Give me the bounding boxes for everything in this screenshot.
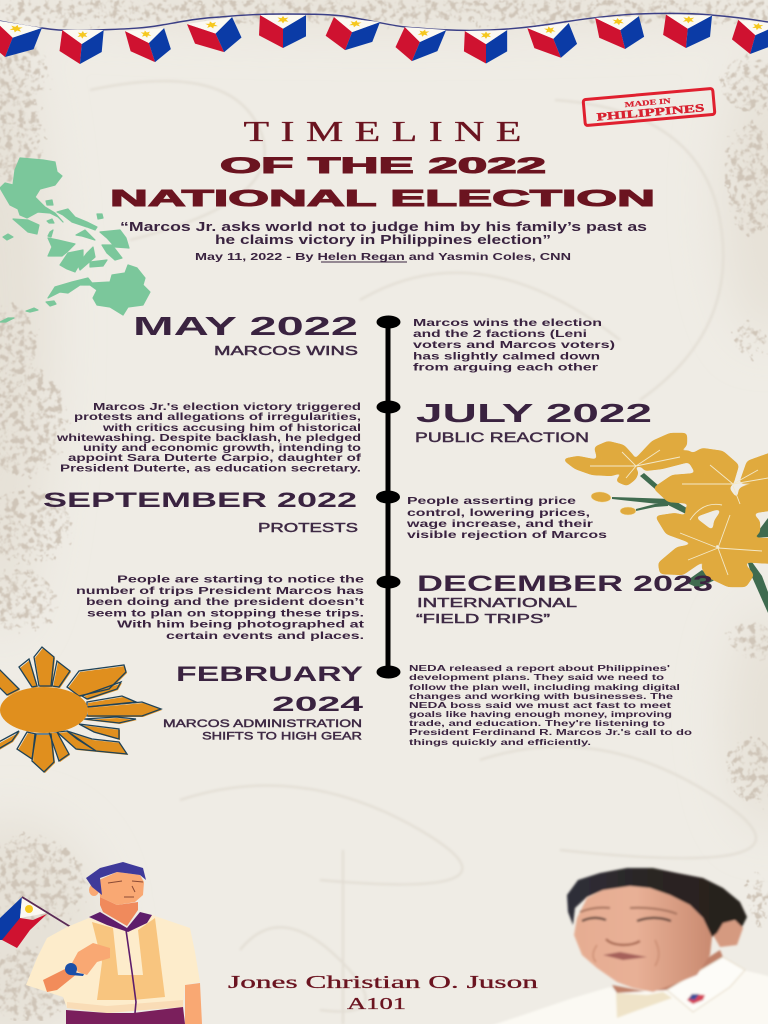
eyebrows [580, 908, 677, 914]
stamp: made in Philippines [583, 88, 715, 126]
node December 2023 [376, 576, 400, 588]
entry: May 2022 description [413, 318, 615, 374]
photo: President Marcos portrait [490, 868, 768, 1024]
stems [612, 473, 768, 613]
petal veins [590, 450, 768, 575]
entry: July 2022 description: appoint Sara Duterte Carpio, daughter of [68, 453, 362, 464]
flag 9 [526, 23, 582, 60]
entry: July 2022 heading: JULY 2022 [416, 398, 652, 428]
entry: September 2022 description: People asserting price [407, 496, 576, 507]
right arm [185, 983, 202, 1024]
flag 4 [186, 17, 247, 56]
author credit: Jones Christian O. Juson [228, 972, 538, 992]
entry: February 2024 heading: SHIFTS TO HIGH GEAR [202, 730, 362, 742]
embroidery [92, 918, 165, 1000]
entry: February 2024 description: trade, and education. They're listening to [409, 718, 665, 728]
lapel pin [687, 994, 705, 1004]
watch [65, 963, 84, 976]
hand [72, 943, 110, 975]
entry: December 2023 description: People are starting to notice the [117, 574, 364, 586]
quote from article: “Marcos Jr. asks world not to judge him by his family’s past as [120, 220, 647, 234]
entry: December 2023 description: certain events and places. [166, 631, 364, 642]
entry: July 2022 heading [415, 398, 652, 445]
node May 2022 [376, 316, 400, 328]
entry: September 2022 description: wage increase, and their [405, 519, 593, 530]
flag 3 [124, 28, 175, 64]
entry: July 2022 heading: PUBLIC REACTION [415, 430, 589, 445]
node July 2022 [376, 400, 400, 414]
hair [86, 862, 146, 895]
flag 8 [464, 30, 507, 64]
title line: Timeline: TIMELINE [244, 115, 521, 147]
entry: September 2022 heading: PROTESTS [258, 521, 358, 535]
map of the Philippines [0, 158, 150, 322]
eyes [582, 918, 671, 921]
middle flower [653, 448, 768, 520]
entry: December 2023 description: number of trips President Marcos has [76, 586, 364, 597]
flag 6 [321, 17, 380, 53]
entry: July 2022 description [56, 402, 362, 474]
entry: July 2022 description: whitewashing. Despite backlash, he pledged [56, 433, 361, 444]
byline: May 11, 2022 - By Helen Regan and Yasmin Coles, CNN [195, 251, 571, 263]
entry: February 2024 description [409, 663, 692, 747]
entry: February 2024 description: NEDA released a report about Philippines' [409, 663, 670, 673]
flag 2 [58, 30, 104, 64]
entry: July 2022 description: unity and economic growth, intending to [83, 443, 361, 454]
entry: February 2024 heading: 2024 [272, 693, 364, 716]
entry: February 2024 description: changes and working with businesses. The [409, 691, 673, 701]
rope [0, 13, 768, 31]
forearm [43, 968, 78, 992]
author credit: A101 [347, 994, 406, 1013]
node February 2024 [376, 666, 400, 678]
flag 7 [390, 27, 446, 63]
node September 2022 [376, 490, 400, 504]
quote from article: he claims victory in Philippines election” [215, 233, 551, 247]
hair [567, 868, 747, 937]
neck [100, 897, 138, 926]
quote from article [120, 220, 647, 247]
flag 11 [662, 15, 712, 48]
flag 12 [729, 20, 768, 56]
entry: February 2024 heading: MARCOS ADMINISTRATION [163, 718, 362, 730]
neck [612, 950, 725, 1000]
collar [89, 912, 152, 932]
shirt hem [67, 1000, 183, 1013]
stamp: made in Philippines: PHILIPPINES [596, 102, 705, 124]
shirt [26, 915, 200, 1013]
flower petals [562, 433, 768, 587]
entry: September 2022 heading [43, 488, 358, 535]
title [110, 115, 655, 211]
entry: May 2022 heading: MAY 2022 [133, 311, 358, 341]
entry: December 2023 heading: “FIELD TRIPS” [416, 612, 550, 626]
pants [66, 1007, 185, 1024]
flower buds [591, 491, 636, 515]
entry: May 2022 description: from arguing each other [413, 362, 598, 374]
eyes and mouth [108, 881, 143, 897]
entry: May 2022 heading: MARCOS WINS [214, 344, 358, 358]
entry: September 2022 description [405, 496, 607, 541]
lower flower [655, 503, 768, 587]
entry: December 2023 description: With him being photographed at [117, 620, 365, 630]
stamp: made in Philippines: MADE IN [624, 96, 672, 109]
entry: December 2023 heading: INTERNATIONAL [417, 596, 577, 610]
entry: July 2022 description: protests and allegations of irregularities, [74, 412, 361, 423]
face [574, 886, 712, 992]
icon: Philippine sun [0, 647, 162, 773]
left collar [616, 992, 672, 1018]
entry: May 2022 description: Marcos wins the election [413, 318, 602, 329]
top flower [562, 433, 695, 486]
entry: May 2022 description: and the 2 factions (Leni [413, 329, 587, 340]
entry: May 2022 description: has slightly calmed down [413, 352, 600, 362]
entry: July 2022 description: Marcos Jr.'s election victory triggered [93, 402, 361, 413]
flag 5 [259, 15, 306, 48]
author credit [228, 972, 538, 1013]
face [99, 872, 144, 905]
ear [713, 920, 743, 947]
entry: February 2024 description: follow the plan well, including making digital [409, 682, 680, 692]
entry: February 2024 description: NEDA boss said we must act fast to meet [409, 700, 671, 710]
timeline spine [376, 316, 400, 678]
entry: February 2024 description: development plans. They said we need to [409, 672, 664, 682]
entry: September 2022 description: visible rejection of Marcos [407, 530, 607, 541]
flag 10 [594, 16, 647, 50]
entry: December 2023 description: been doing and the president doesn’t [86, 597, 365, 608]
entry: February 2024 description: President Ferdinand R. Marcos Jr.'s call to do [409, 727, 692, 737]
entry: December 2023 description: seem to plan on stopping these trips. [87, 608, 364, 620]
nose [606, 939, 640, 945]
title line: national election: NATIONAL ELECTION [110, 185, 655, 211]
flag 1 [0, 20, 42, 61]
bunting of Philippine flags [0, 13, 768, 64]
entry: July 2022 description: with critics accusing him of historical [102, 423, 361, 434]
entry: May 2022 description: voters and Marcos voters) [413, 340, 615, 351]
entry: December 2023 description [76, 574, 365, 642]
entry: December 2023 heading [416, 571, 713, 626]
small flag [0, 897, 95, 948]
entry: February 2024 description: things quickly and efficiently. [409, 737, 591, 747]
right collar [667, 957, 745, 1012]
entry: September 2022 heading: SEPTEMBER 2022 [43, 488, 357, 512]
cheek crease [593, 940, 659, 966]
flower illustration [562, 433, 768, 613]
entry: September 2022 description: control, lowering prices, [407, 508, 590, 519]
entry: February 2024 heading: FEBRUARY [176, 663, 363, 686]
entry: July 2022 description: President Duterte, as education secretary. [60, 464, 361, 474]
entry: December 2023 heading: DECEMBER 2023 [417, 571, 713, 596]
entry: February 2024 heading [163, 663, 364, 742]
title line: of the 2022: OF THE 2022 [220, 153, 546, 178]
mouth [603, 952, 647, 960]
illustration: man with flag [0, 862, 202, 1024]
shirt [490, 957, 768, 1024]
entry: February 2024 description: goals like having enough money, improving [409, 709, 672, 719]
entry: May 2022 heading [133, 311, 358, 358]
ear [89, 884, 99, 896]
placket [126, 930, 136, 1013]
